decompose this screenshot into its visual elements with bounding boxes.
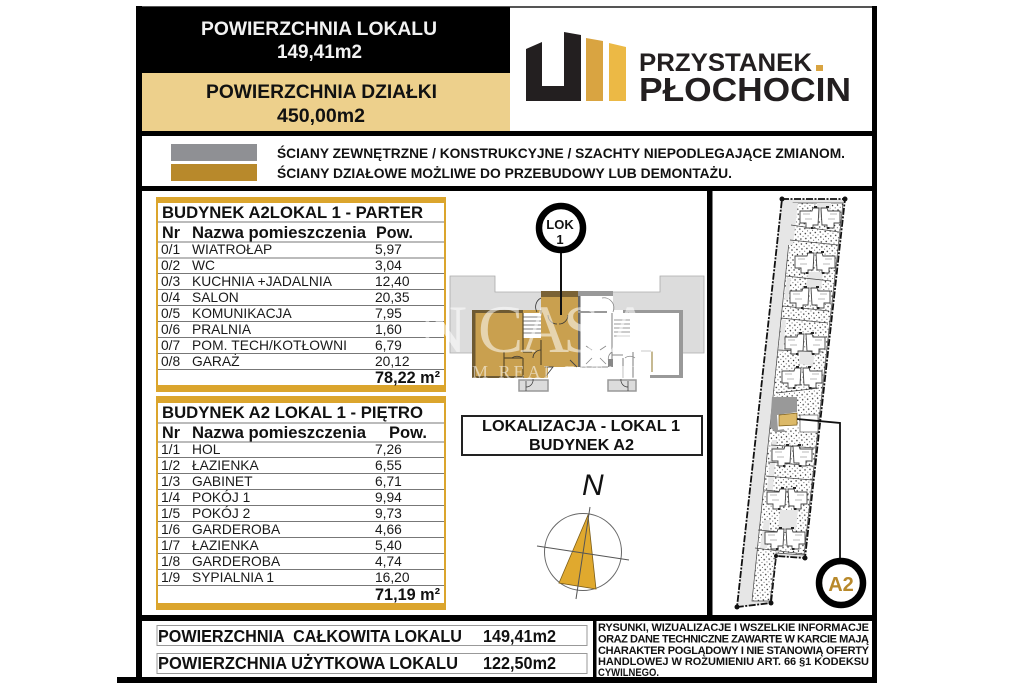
table rows: POKÓJ 1 [192,489,250,505]
table rows: ŁAZIENKA [192,538,260,553]
boundary corner points [734,196,848,610]
table rows: 20,12 [375,354,410,369]
table rows: KOMUNIKACJA [192,306,292,321]
summary: total area: 149,41m2 [483,626,556,646]
table rows: 0/1 [161,242,180,257]
table rows: 3,04 [375,258,402,273]
table rows: HOL [192,442,221,457]
table rows: POM. TECH/KOTŁOWNI [192,338,347,353]
internal road patches [760,203,831,548]
table rows: SALON [192,290,239,305]
table rows: GABINET [192,474,253,489]
table rows: 6,79 [375,338,402,353]
table rows: 0/8 [161,354,181,369]
table header: Nr [162,423,180,442]
panel: plot area: 450,00m2 [277,105,365,127]
plot dividers [755,225,839,554]
page frame [117,6,877,683]
table rows: 1,60 [375,322,402,337]
table rows: 6,55 [375,458,402,473]
callout: A2 marker [797,419,863,605]
table rows: GARDEROBA [192,522,281,537]
legend text: partition walls: ŚCIANY DZIAŁOWE MOŻLIWE DO PRZEBUDOWY LUB DEMONTAŻU. [277,166,732,181]
table rows: 1/2 [161,458,180,473]
table rows: 0/2 [161,258,180,273]
disclaimer: ORAZ DANE TECHNICZNE ZAWARTE W KARCIE MAJĄ [598,634,869,646]
table rows: 1/8 [161,554,181,569]
table rows: ŁAZIENKA [192,458,260,473]
panel: plot area: POWIERZCHNIA DZIAŁKI [206,81,437,103]
logo: Przystanek Płochocin [526,32,851,109]
table rows: 4,74 [375,554,402,569]
panel: apartment area: 149,41m2 [277,41,362,63]
table rows: 6,71 [375,474,402,489]
table rows: 1/6 [161,522,181,537]
table rows: 1/9 [161,570,181,585]
location label: LOKALIZACJA - LOKAL 1 [482,418,680,435]
table header: Nr [162,223,180,242]
table header: Pow. [376,223,413,242]
table title: BUDYNEK A2LOKAL 1 - PARTER [162,203,423,222]
table rows: 12,40 [375,274,410,289]
highlighted building [779,413,797,426]
table rows: 4,66 [375,522,402,537]
location label [462,416,702,455]
disclaimer: CYWILNEGO. [598,667,659,679]
callout: LOK 1 marker [539,206,583,315]
floor plan [418,276,704,391]
panel: plot area [142,73,510,131]
table rows: 1/7 [161,538,180,553]
table: first floor rooms [156,396,446,610]
summary: total area: POWIERZCHNIA CAŁKOWITA LOKALU [158,626,462,646]
table: ground floor rooms [156,197,446,392]
north label: N [582,469,604,502]
table rows: 5,97 [375,242,402,257]
plan: neighbouring unit [578,291,683,378]
table header [162,423,427,442]
table rows: POKÓJ 2 [192,505,250,521]
legend swatch: partition walls [171,164,257,181]
table rows: 1/5 [161,506,181,521]
panel: apartment area [136,7,510,73]
table rows: 0/4 [161,290,181,305]
table header: Pow. [389,423,427,442]
disclaimer [598,622,870,679]
disclaimer: CHARAKTER POGLĄDOWY I NIE STANOWIĄ OFERTY [598,645,870,657]
table rows: 0/7 [161,338,180,353]
callout: A2 marker: A2 [828,574,854,596]
logo: Przystanek Płochocin: PŁOCHOCIN [639,72,851,109]
table total: 78,22 m² [375,368,440,387]
plan: highlighted unit [472,291,578,378]
location label: BUDYNEK A2 [529,437,634,454]
table rows: SYPIALNIA 1 [192,570,274,585]
table rows: GARAŻ [192,352,240,369]
table total: 71,19 m² [375,585,440,604]
disclaimer: HANDLOWEJ W ROZUMIENIU ART. 66 §1 KODEKSU [598,656,869,668]
table rows [161,242,410,369]
table rows: 0/5 [161,306,181,321]
panel: apartment area: POWIERZCHNIA LOKALU [201,18,437,40]
table rows: WIATROŁAP [192,242,272,257]
table header: Nazwa pomieszczenia [192,223,367,242]
house clusters [765,206,840,550]
table rows: 0/6 [161,322,181,337]
table rows [161,442,410,585]
summary: usable area: 122,50m2 [483,653,556,673]
table rows: 1/4 [161,490,181,505]
site plan [734,196,848,610]
table rows: 5,40 [375,538,402,553]
legend swatch: structural walls [171,144,257,161]
table rows: 9,94 [375,490,402,505]
watermark: NCASA [418,291,655,367]
table rows: 1/3 [161,474,181,489]
table rows: 9,73 [375,506,402,521]
table title: BUDYNEK A2 LOKAL 1 - PIĘTRO [162,403,423,422]
icon: compass [537,507,629,599]
table rows: KUCHNIA +JADALNIA [192,274,333,289]
callout: LOK 1 marker: 1 [556,232,564,247]
table rows: 7,95 [375,306,402,321]
table rows: 0/3 [161,274,181,289]
legend [171,144,845,181]
plots [752,203,843,601]
table rows: 1/1 [161,442,180,457]
disclaimer: RYSUNKI, WIZUALIZACJE I WSZELKIE INFORMACJE [598,622,869,634]
legend text: structural walls: ŚCIANY ZEWNĘTRZNE / KONSTRUKCYJNE / SZACHTY NIEPODLEGAJĄCE ZMIANOM. [277,146,845,161]
table rows: WC [192,258,215,273]
table rows: 7,26 [375,442,402,457]
table rows: PRALNIA [192,322,252,337]
summary: usable area: POWIERZCHNIA UŻYTKOWA LOKALU [158,653,458,673]
selected building plot [770,397,797,432]
site boundary [737,199,845,607]
table header: Nazwa pomieszczenia [192,423,367,442]
table rows: GARDEROBA [192,554,281,569]
logo: Przystanek Płochocin: PRZYSTANEK [639,49,812,77]
table rows: 20,35 [375,290,410,305]
callout: LOK 1 marker: LOK [546,217,574,232]
table rows: 16,20 [375,570,410,585]
watermark: M REAL ESTATE [472,362,646,382]
